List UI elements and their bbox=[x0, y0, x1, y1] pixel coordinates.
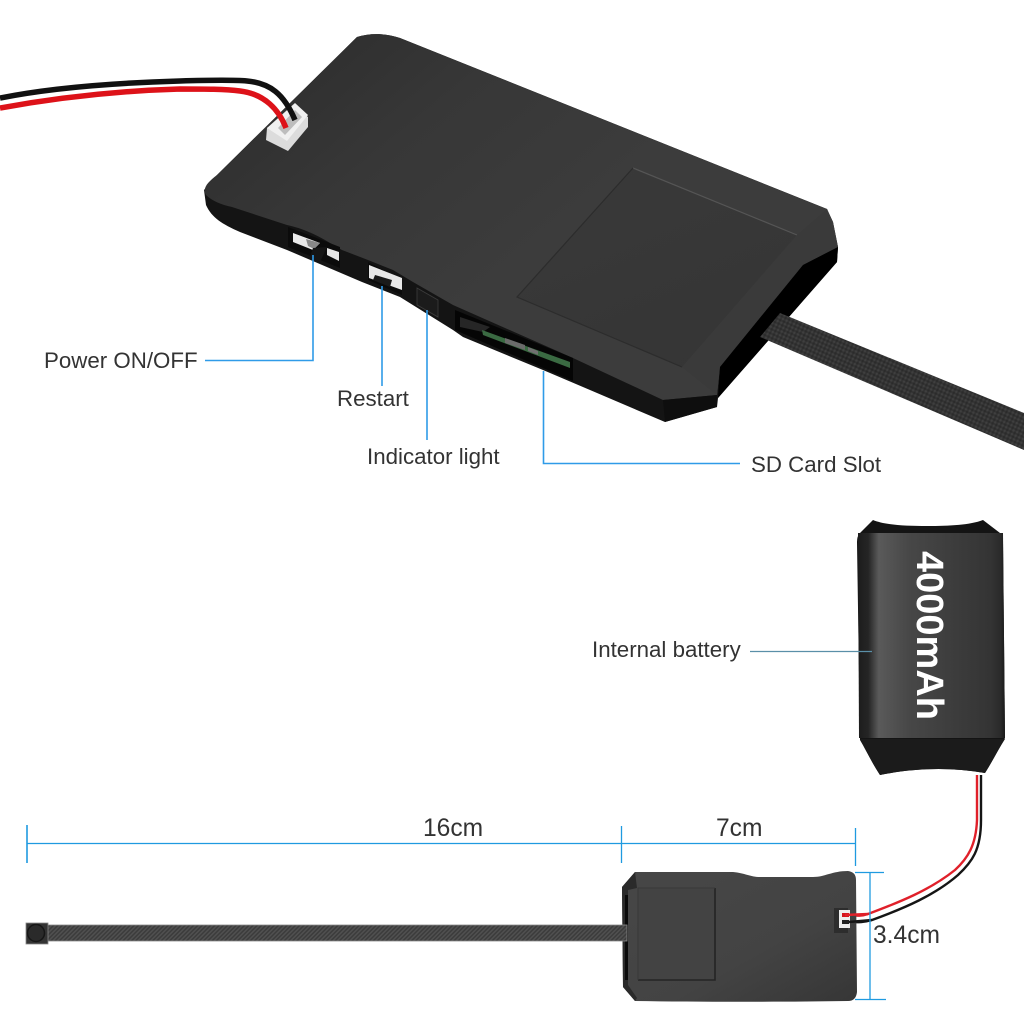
label: 16cm: 16cm bbox=[423, 815, 483, 842]
label: Power ON/OFF: Power ON/OFF bbox=[44, 348, 198, 373]
device body lower edge bbox=[204, 34, 838, 422]
camera lens head bbox=[26, 923, 48, 944]
rear cable bay bbox=[718, 247, 838, 398]
connector bbox=[834, 908, 850, 933]
battery wires bbox=[843, 775, 981, 922]
battery capacity text: 4000mAh bbox=[908, 551, 950, 720]
label: 7cm: 7cm bbox=[716, 815, 762, 842]
main device: camera module bbox=[204, 34, 838, 422]
label: Internal battery: Internal battery bbox=[592, 637, 742, 662]
restart button bbox=[368, 262, 402, 295]
callout line: internal battery bbox=[750, 650, 872, 652]
lower ribbon cable bbox=[46, 925, 627, 941]
label: 3.4cm: 3.4cm bbox=[873, 922, 940, 949]
small device: top view bbox=[622, 871, 857, 1002]
connector wires over device bbox=[845, 914, 872, 922]
indicator light bbox=[417, 288, 438, 317]
power switch bbox=[288, 227, 340, 268]
length dimension lines bbox=[27, 825, 856, 866]
battery panel bbox=[638, 888, 715, 980]
white wire connector bbox=[266, 103, 308, 151]
callout lines bbox=[205, 255, 740, 464]
bevel facets bbox=[682, 209, 838, 395]
label: Indicator light: Indicator light bbox=[367, 444, 500, 469]
SD card slot bbox=[455, 310, 573, 381]
raised battery panel bbox=[517, 168, 797, 367]
top wires: black and red bbox=[0, 80, 295, 128]
device top surface bbox=[205, 34, 838, 400]
label: Restart: Restart bbox=[337, 386, 410, 411]
label: SD Card Slot: SD Card Slot bbox=[751, 452, 882, 477]
front lower bevel bbox=[663, 395, 717, 422]
ribbon cable: top device bbox=[760, 313, 1024, 450]
battery pack bbox=[857, 520, 1005, 775]
height dimension lines bbox=[855, 872, 886, 1000]
